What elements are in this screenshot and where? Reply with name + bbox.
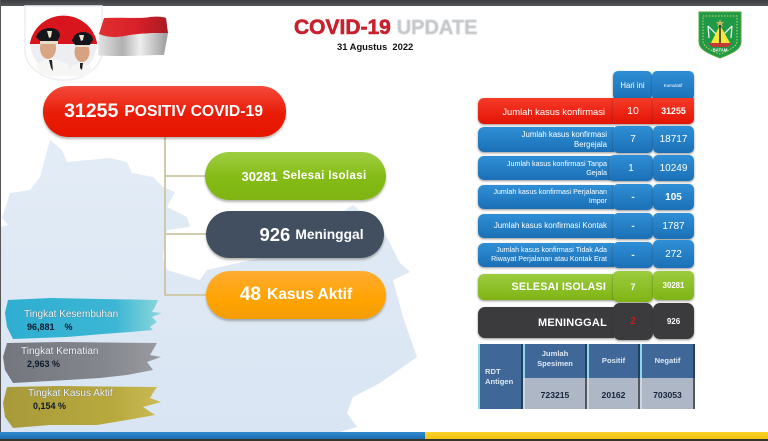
RDT antigen table — [478, 344, 695, 409]
row: asymptomatic: Gejala — [586, 168, 607, 177]
leaders photo badge — [24, 5, 103, 81]
RDT label: RDT — [485, 366, 501, 376]
top dark bar — [0, 0, 768, 6]
row: confirmed — [476, 98, 696, 126]
row: imported: - — [631, 192, 635, 202]
row: imported — [476, 184, 696, 212]
row: symptomatic: 7 — [630, 134, 636, 145]
row: confirmed: Jumlah kasus konfirmasi — [502, 106, 605, 116]
bottom bar — [0, 432, 768, 441]
date: 31 Agustus 2022 — [337, 41, 413, 52]
RDT label: Antigen — [485, 376, 513, 386]
city emblem: BATAM — [713, 48, 728, 52]
rate: active cases — [28, 388, 113, 411]
rate: active cases: Tingkat Kasus Aktif — [28, 388, 113, 399]
active cases pill: 48 — [240, 284, 261, 305]
Indonesian flag — [98, 16, 168, 56]
RDT positive — [587, 344, 640, 409]
row: confirmed: 31255 — [661, 106, 686, 116]
RDT specimen: 723215 — [541, 390, 569, 400]
RDT positive: Positif — [602, 356, 625, 365]
total positive pill: 31255 — [64, 100, 118, 122]
recovered pill: Selesai Isolasi — [283, 170, 367, 182]
row: no history: Jumlah kasus konfirmasi Tidak Ada — [496, 246, 607, 254]
row: symptomatic: Bergejala — [574, 140, 607, 148]
row: imported: 105 — [665, 192, 682, 202]
row: deaths: MENINGGAL — [538, 316, 607, 328]
active cases pill — [206, 271, 386, 319]
rate brush strokes — [3, 298, 162, 428]
left edge line — [0, 0, 1, 441]
deaths pill: Meninggal — [295, 227, 364, 242]
recovered pill: 30281 — [241, 168, 278, 184]
row: recovered: 30281 — [663, 281, 684, 290]
row: deaths — [476, 302, 696, 342]
row: asymptomatic: Jumlah kasus konfirmasi Tanpa — [507, 158, 607, 168]
rate: recovery: 96,881 % — [27, 322, 73, 332]
RDT negative: 703053 — [653, 390, 682, 400]
row: no history: 272 — [665, 248, 682, 260]
data table — [476, 70, 696, 342]
RDT specimen — [523, 344, 587, 409]
RDT specimen: Spesimen — [537, 358, 573, 368]
RDT negative — [640, 344, 695, 409]
row: contact — [476, 212, 696, 242]
header: cumulative: Kumulatif — [664, 83, 682, 88]
row: deaths: 926 — [667, 316, 680, 326]
rate: active cases: 0,154 % — [33, 401, 66, 411]
row: no history: Riwayat Perjalanan atau Kontak Erat — [491, 255, 607, 263]
row: recovered — [476, 270, 696, 304]
row: asymptomatic — [476, 154, 696, 184]
rate: mortality — [21, 346, 98, 369]
header: cumulative — [652, 71, 694, 100]
row: contact: 1787 — [662, 220, 685, 232]
city emblem — [698, 12, 742, 58]
rate: recovery: Tingkat Kesembuhan — [24, 309, 118, 320]
row: no history: - — [631, 250, 635, 260]
row: asymptomatic: 1 — [628, 162, 634, 174]
header: today — [613, 71, 652, 100]
row: contact: Jumlah kasus konfirmasi Kontak — [494, 221, 607, 230]
RDT positive: 20162 — [602, 390, 625, 400]
row: contact: - — [631, 220, 635, 232]
row: recovered: 7 — [630, 282, 636, 292]
row: confirmed: 10 — [627, 105, 639, 117]
rate: mortality: Tingkat Kematian — [21, 346, 98, 357]
row: symptomatic — [476, 126, 696, 155]
total positive pill: POSITIV COVID-19 — [124, 102, 263, 120]
row: recovered: SELESAI ISOLASI — [512, 281, 606, 293]
rate: mortality: 2,963 % — [27, 359, 60, 369]
row: no history — [476, 240, 696, 270]
row: imported: Jumlah kasus konfirmasi Perjalanan — [493, 188, 607, 196]
total positive pill — [43, 86, 286, 137]
background map silhouette — [1, 140, 417, 432]
header: today: Hari ini — [620, 81, 645, 90]
active cases pill: Kasus Aktif — [267, 286, 352, 303]
connector lines — [164, 137, 206, 296]
row: asymptomatic: 10249 — [660, 162, 687, 174]
row: imported: Impor — [589, 197, 607, 205]
RDT negative: Negatif — [655, 356, 680, 365]
row: symptomatic: Jumlah kasus konfirmasi — [522, 130, 607, 139]
RDT label — [478, 344, 523, 409]
RDT specimen: Jumlah — [542, 348, 568, 358]
rate: recovery — [24, 309, 118, 332]
deaths pill — [206, 211, 384, 258]
title: COVID-19 UPDATE — [294, 16, 477, 39]
recovered pill — [205, 152, 386, 200]
row: deaths: 2 — [630, 316, 636, 327]
row: symptomatic: 18717 — [660, 134, 687, 145]
deaths pill: 926 — [259, 224, 290, 244]
